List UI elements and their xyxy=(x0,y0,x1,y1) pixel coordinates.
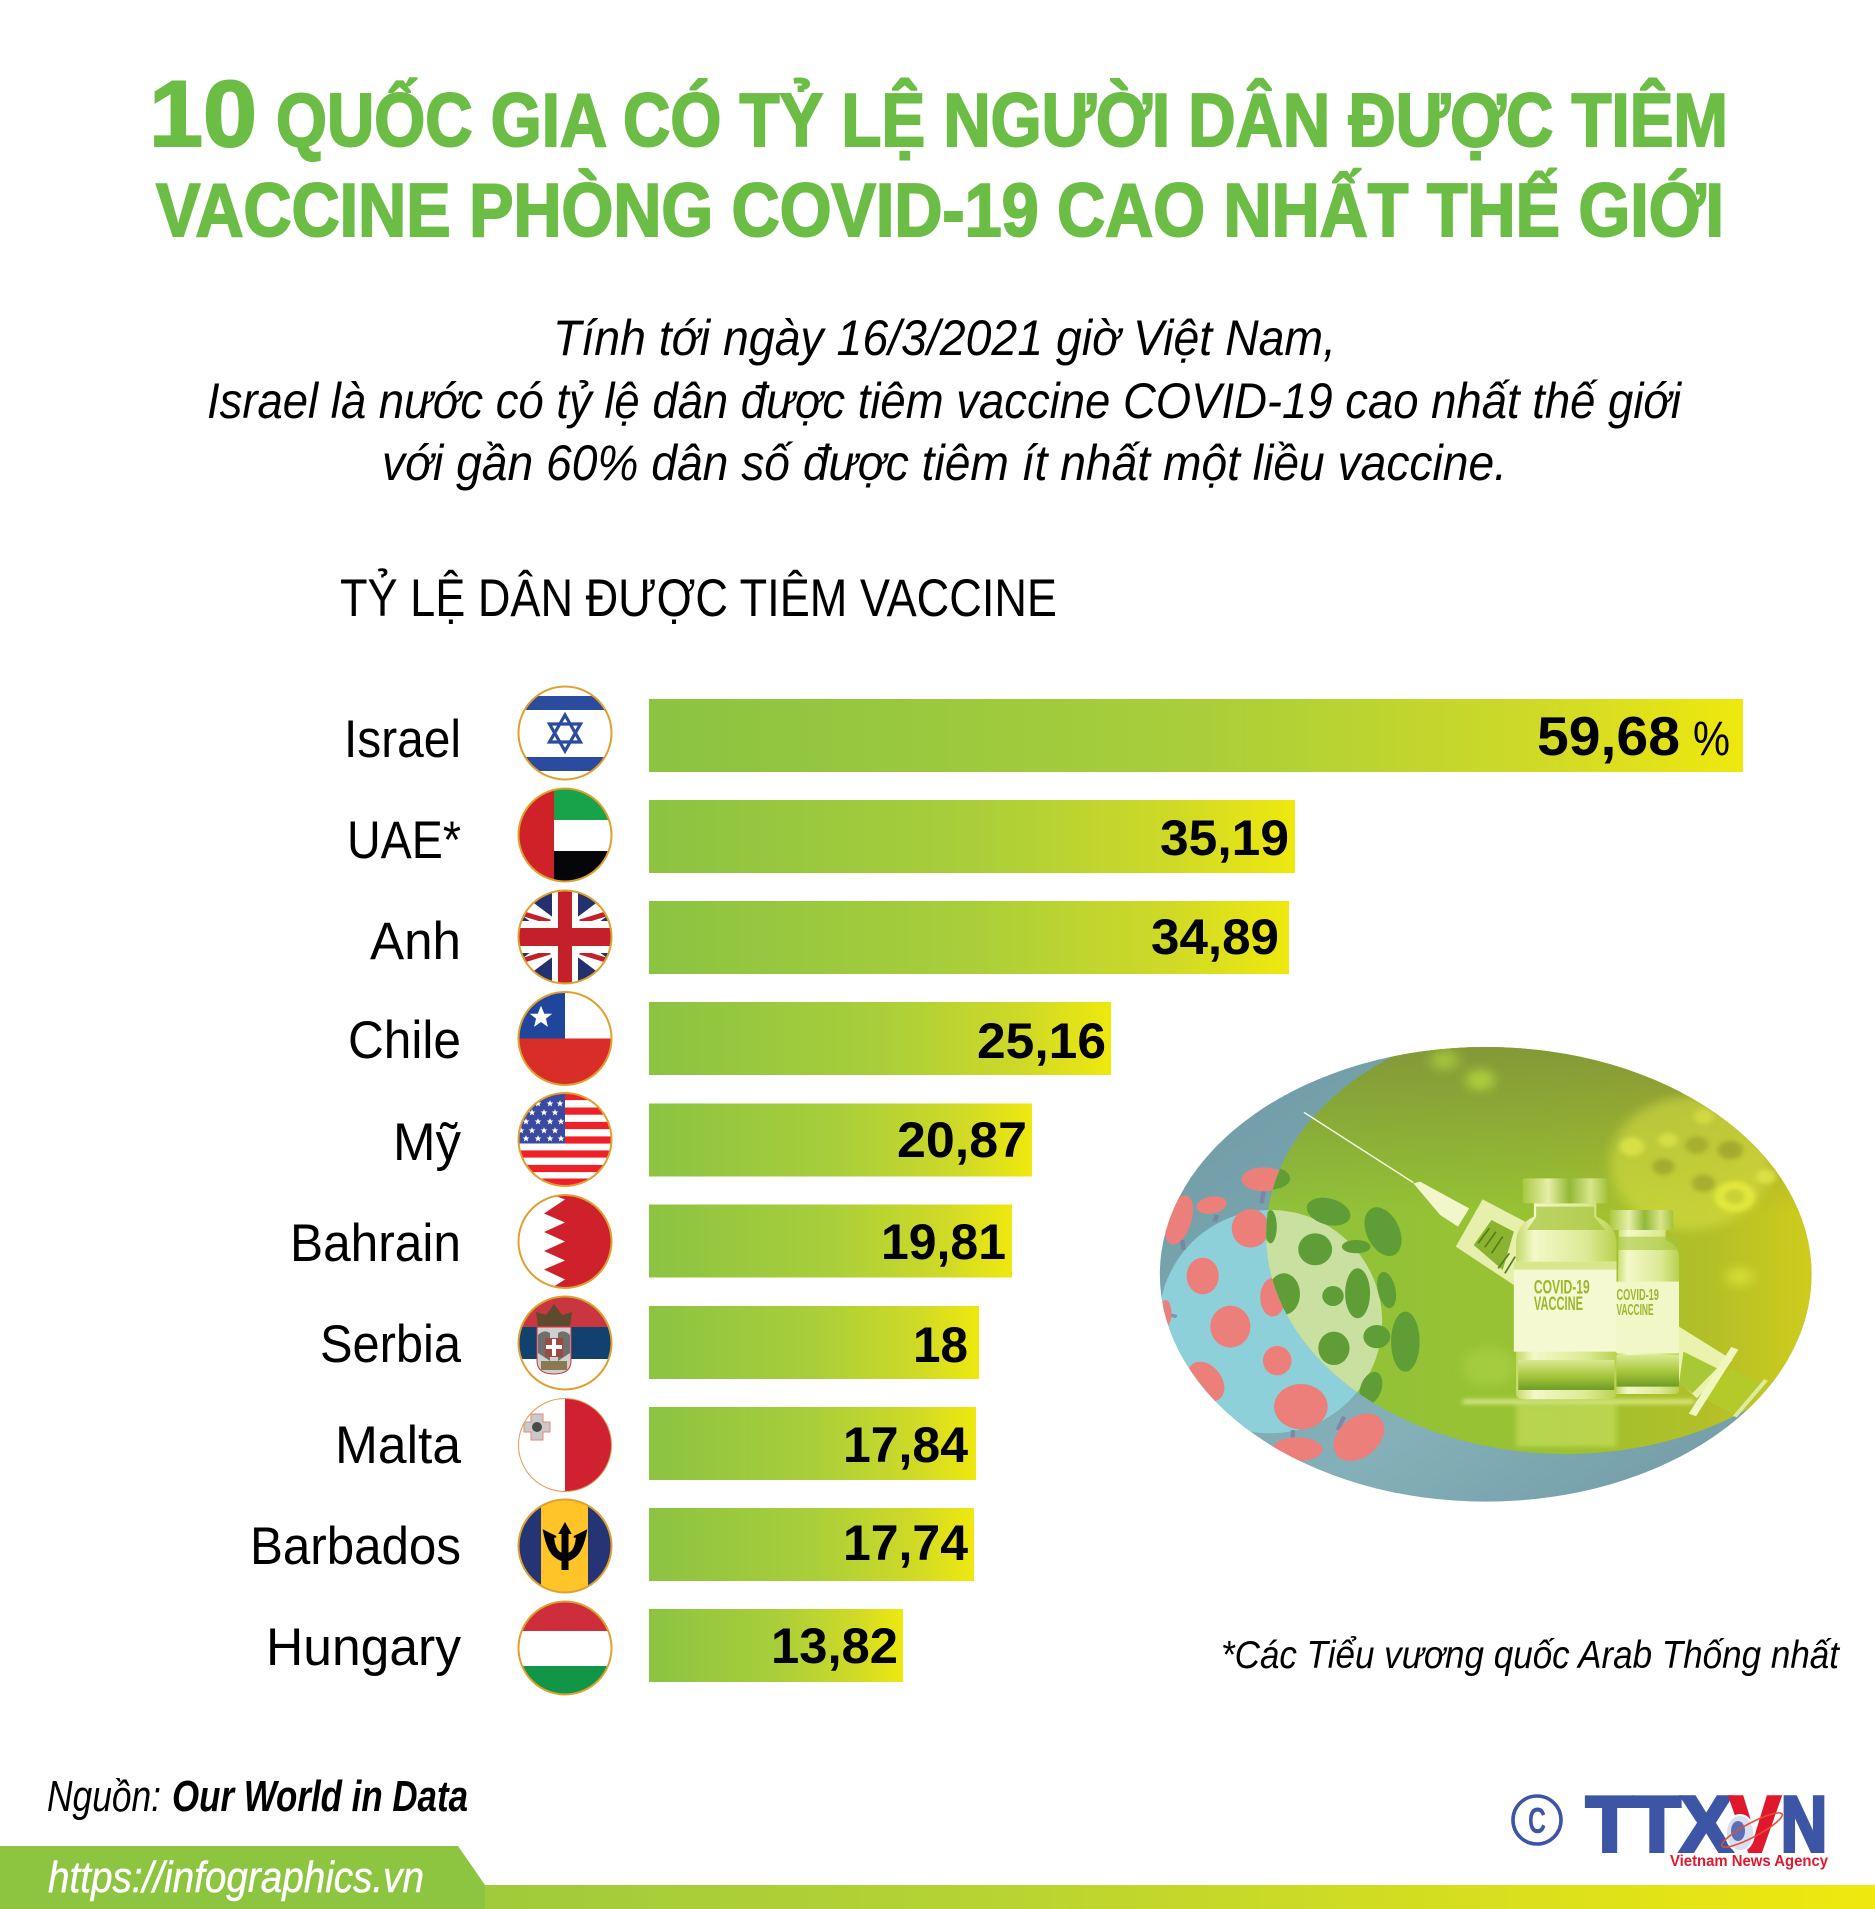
flag: Malta xyxy=(517,1397,613,1493)
vial label text: COVID-19 xyxy=(1534,1276,1590,1298)
title xyxy=(149,61,1728,252)
bar: Anh: 34,89 xyxy=(1151,909,1279,965)
footer band xyxy=(0,1846,1875,1909)
flag: Serbia xyxy=(517,1295,613,1391)
flag: Israel xyxy=(517,685,613,781)
bar: UAE: 35,19 xyxy=(1160,810,1289,866)
country labels: Barbados xyxy=(250,1517,461,1576)
flag: UAE xyxy=(517,787,613,883)
source: Nguồn: xyxy=(47,1772,161,1821)
flag: Barbados xyxy=(517,1498,613,1594)
vial label text xyxy=(1534,1280,1658,1315)
country labels: Anh xyxy=(370,912,461,971)
flag: USA xyxy=(517,1092,613,1188)
bar: Mỹ: 20,87 xyxy=(897,1112,1027,1168)
illustration: virus and vaccine xyxy=(1160,1047,1812,1502)
bar: Bahrain: 19,81 xyxy=(881,1214,1006,1270)
website url: https://infographics.vn xyxy=(48,1853,424,1902)
title: 10 xyxy=(149,61,257,166)
country labels: UAE* xyxy=(347,811,461,870)
intro text: Tính tới ngày 16/3/2021 giờ Việt Nam, xyxy=(553,310,1336,366)
title: VACCINE PHÒNG COVID-19 CAO NHẤT THẾ GIỚI xyxy=(156,168,1724,252)
bar: Israel xyxy=(649,699,1743,772)
intro text xyxy=(207,310,1683,491)
bar: Barbados xyxy=(649,1508,974,1581)
country labels: Chile xyxy=(348,1011,461,1070)
bar: Chile xyxy=(649,1002,1111,1075)
bar: Anh xyxy=(649,901,1289,974)
flag: UK xyxy=(517,889,613,985)
bar: Malta: 17,84 xyxy=(843,1417,968,1473)
bar: Hungary: 13,82 xyxy=(771,1618,898,1674)
country labels: Serbia xyxy=(320,1315,461,1374)
intro text: với gần 60% dân số được tiêm ít nhất một liều vaccine. xyxy=(382,435,1507,491)
flag: Bahrain xyxy=(517,1194,613,1290)
bar: Bahrain xyxy=(649,1204,1012,1278)
country labels: Mỹ xyxy=(393,1113,461,1172)
bar: Malta xyxy=(649,1407,976,1480)
country labels: Malta xyxy=(335,1416,462,1475)
bar: UAE xyxy=(649,800,1295,873)
country labels: Hungary xyxy=(266,1618,461,1677)
logo: TTXVN: N xyxy=(1781,1780,1827,1868)
bar: Barbados: 17,74 xyxy=(843,1515,968,1571)
country labels: Bahrain xyxy=(290,1214,461,1273)
source xyxy=(47,1772,468,1821)
source: Our World in Data xyxy=(172,1772,468,1821)
logo: TTXVN: V xyxy=(1730,1780,1780,1868)
country labels: Israel xyxy=(344,710,461,769)
bar: Serbia: 18 xyxy=(913,1317,968,1373)
bar: Chile: 25,16 xyxy=(977,1013,1106,1069)
country labels xyxy=(250,710,462,1677)
logo: TTXVN: Vietnam News Agency xyxy=(1670,1853,1828,1870)
flag: Chile xyxy=(517,990,613,1086)
bar: Mỹ xyxy=(649,1104,1032,1176)
bar: Hungary xyxy=(649,1609,903,1682)
bar: Serbia xyxy=(649,1306,979,1379)
illustration: virus and vaccine: VACCINE xyxy=(1616,1301,1654,1319)
logo: TTXVN xyxy=(1513,1780,1828,1870)
intro text: Israel là nước có tỷ lệ dân được tiêm vaccine COVID-19 cao nhất thế giới xyxy=(207,373,1683,429)
logo: TTXVN: C xyxy=(1528,1800,1546,1841)
illustration: virus and vaccine: COVID-19 xyxy=(1616,1286,1659,1304)
vial label text: VACCINE xyxy=(1534,1292,1583,1314)
chart heading: TỶ LỆ DÂN ĐƯỢC TIÊM VACCINE xyxy=(340,568,1057,628)
logo: TTXVN: TTX xyxy=(1586,1780,1732,1868)
bar: Israel: % xyxy=(1693,713,1730,766)
bar: Israel: 59,68 xyxy=(1537,705,1680,767)
flag: Hungary xyxy=(517,1600,613,1696)
